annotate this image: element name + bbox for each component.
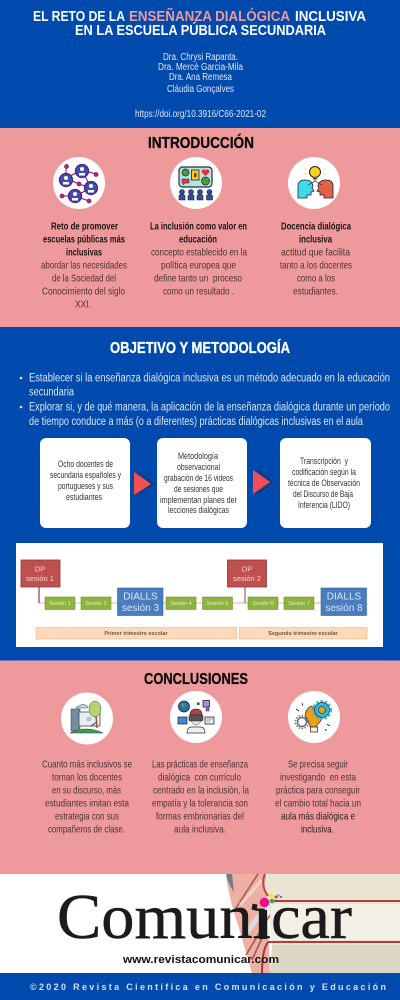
text: col 1: XXI. bbox=[75, 298, 91, 310]
arrow 1 bbox=[134, 472, 153, 495]
heading: introducción: INTRODUCCIÓN bbox=[148, 133, 254, 152]
text: col 2: como un resultado . bbox=[163, 286, 234, 298]
DP sesión 2: sesión 2 bbox=[233, 574, 261, 583]
text: col 1: Reto de promover bbox=[51, 220, 118, 232]
card: transcripción: Inferencia (LIDO) bbox=[298, 500, 350, 511]
text: conclusion 2: empatía y la tolerancia son bbox=[152, 798, 248, 810]
title bbox=[33, 7, 366, 39]
authors bbox=[158, 52, 243, 95]
text: col 2 bbox=[150, 220, 247, 298]
card: transcripción: del Discurso de Baja bbox=[293, 489, 353, 500]
authors: Dra. Chrysi Rapanta. bbox=[163, 52, 238, 63]
text: conclusion 1: tornan los docentes bbox=[52, 772, 122, 784]
card: metodología: grabación de 16 videos bbox=[164, 473, 233, 484]
green sessions: Sesión 2 bbox=[85, 601, 107, 607]
card: transcripción: Transcripción y bbox=[300, 456, 348, 467]
text: col 2: concepto establecido en la bbox=[151, 246, 247, 258]
text: col 3: como a los bbox=[297, 272, 335, 284]
authors: Dra. Mercè Garcia-Mila bbox=[158, 62, 243, 73]
text: conclusion 3: investigando en esta bbox=[280, 772, 356, 784]
website url: www.revistacomunicar.com bbox=[122, 954, 279, 966]
text: conclusion 1: Cuanto más inclusivos se bbox=[42, 758, 132, 770]
card: participantes: secundaria españoles y bbox=[50, 470, 121, 481]
green sessions: Sesión 7 bbox=[288, 601, 310, 607]
timeline diagram bbox=[16, 543, 383, 647]
text: conclusion 2: centrado en la inclusión, la bbox=[153, 784, 249, 796]
panel: header bbox=[0, 0, 400, 128]
text: col 2: define tanto un proceso bbox=[154, 272, 242, 284]
text: conclusion 2 bbox=[152, 758, 249, 836]
DIALLS sesión 8: DIALLS bbox=[327, 592, 362, 602]
icon: inclusive school bbox=[61, 692, 113, 744]
text: conclusion 2: Las prácticas de enseñanza bbox=[152, 758, 248, 770]
text: col 3: tanto a los docentes bbox=[280, 260, 352, 272]
card: participantes: estudiantes bbox=[66, 492, 102, 503]
text: col 1: abordar las necesidades bbox=[41, 260, 127, 272]
text: conclusion 1: estrategia con sus bbox=[55, 810, 119, 822]
title: ENSEÑANZA DIALÓGICA bbox=[129, 7, 290, 25]
text: conclusion 3: aula más dialógica e bbox=[281, 810, 355, 822]
logo: Comunicar wordmark: Comunıcar bbox=[57, 881, 352, 952]
green sessions: Sesión 6 bbox=[252, 601, 274, 607]
card: metodología bbox=[157, 438, 247, 528]
text: col 3: inclusiva bbox=[299, 234, 332, 246]
text: col 1: inclusivas bbox=[66, 246, 102, 258]
primer trimestre bbox=[36, 628, 236, 639]
text: col 3: actitud que facilita bbox=[281, 246, 350, 258]
panel: conclusiones bbox=[0, 660, 400, 874]
card: transcripción: técnica de Observación bbox=[288, 478, 360, 489]
DP sesión 1: DP bbox=[35, 564, 45, 574]
authors: Dra. Ana Remesa bbox=[169, 72, 232, 83]
authors: Cláudia Gonçalves bbox=[167, 84, 234, 95]
text: col 2: La inclusión como valor en bbox=[150, 220, 247, 232]
text: conclusion 1: estudiantes imitan esta bbox=[45, 798, 129, 810]
footer bbox=[0, 973, 400, 1000]
text: conclusion 2: aula inclusiva. bbox=[174, 824, 226, 836]
text: col 2: política europea que bbox=[161, 260, 236, 272]
DOI link: https://doi.org/10.3916/C66-2021-02 bbox=[135, 109, 266, 120]
DIALLS sesión 8: sesión 8 bbox=[325, 603, 363, 614]
text: conclusion 3: Se precisa seguir bbox=[288, 758, 348, 770]
text: conclusion 1: en su discurso, más bbox=[52, 784, 121, 796]
text: conclusion 3 bbox=[275, 758, 361, 836]
photo: books bbox=[226, 874, 400, 973]
panel: introducción bbox=[0, 128, 400, 327]
DIALLS sesión 3: DIALLS bbox=[123, 592, 158, 602]
green sessions bbox=[45, 597, 314, 610]
card: transcripción: codificación según la bbox=[292, 467, 357, 478]
card: metodología: Metodología bbox=[178, 451, 219, 462]
title: EN LA ESCUELA PÚBLICA SECUNDARIA bbox=[75, 21, 326, 39]
text: col 1 bbox=[41, 220, 127, 310]
green sessions: Sesión 5 bbox=[207, 601, 228, 607]
text: conclusion 1: compañeros de clase. bbox=[48, 824, 125, 836]
text: col 1: escuelas públicas más bbox=[43, 234, 125, 246]
card: metodología: lecciones dialógicas bbox=[168, 505, 229, 516]
DP sesión 2 bbox=[228, 560, 266, 587]
text: col 3 bbox=[280, 220, 352, 298]
card: participantes: Ocho docentes de bbox=[58, 459, 113, 470]
text: col 3: estudiantes. bbox=[293, 286, 338, 298]
icon: virtual reality bbox=[170, 691, 222, 743]
title: EL RETO DE LA bbox=[33, 9, 125, 25]
card: participantes bbox=[40, 438, 130, 528]
text: col 2: educación bbox=[179, 234, 217, 246]
card: transcripción bbox=[280, 438, 371, 528]
DP sesión 1: sesión 1 bbox=[26, 574, 54, 583]
arrow 2 bbox=[253, 470, 272, 494]
text: conclusion 2: dialógica con currículo bbox=[158, 772, 241, 784]
heading: conclusiones: CONCLUSIONES bbox=[144, 671, 248, 688]
card: metodología: implementan planes der bbox=[160, 495, 237, 506]
DP sesión 2: DP bbox=[242, 564, 252, 574]
bullet list: secundaria bbox=[29, 386, 74, 398]
DIALLS sesión 8 bbox=[321, 588, 366, 616]
segundo trimestre: Segundo trimestre escolar bbox=[268, 631, 339, 637]
DIALLS sesión 3 bbox=[118, 588, 163, 616]
DIALLS sesión 3: sesión 3 bbox=[122, 603, 160, 614]
text: col 3: Docencia dialógica bbox=[281, 220, 351, 232]
card: participantes: portugueses y sus bbox=[58, 481, 113, 492]
title: INCLUSIVA bbox=[295, 9, 366, 25]
heading: objetivo: OBJETIVO Y METODOLOGÍA bbox=[110, 338, 290, 357]
icon: light bulb and gears bbox=[288, 691, 340, 743]
green sessions: Sesión 1 bbox=[49, 601, 71, 607]
bullet list bbox=[20, 372, 390, 428]
icon: classroom board bbox=[170, 157, 222, 209]
text: conclusion 3: el cambio total hacia un bbox=[275, 798, 361, 810]
icon: network of people bbox=[53, 157, 105, 209]
panel: Comunicar logo band bbox=[0, 874, 400, 973]
text: conclusion 1 bbox=[42, 758, 132, 836]
primer trimestre: Primer trimestre escolar bbox=[104, 631, 168, 637]
text: conclusion 3: inclusiva. bbox=[301, 824, 334, 836]
footer: ©2020 Revista Científica en Comunicación y Educación bbox=[30, 982, 386, 992]
card: metodología: observacional bbox=[177, 462, 220, 473]
card: metodología: de sesiones que bbox=[174, 484, 223, 495]
panel: objetivo y metodología bbox=[0, 327, 400, 660]
text: col 1: de la Sociedad del bbox=[52, 272, 116, 284]
icon: dialogue heads with light bulb bbox=[288, 157, 340, 209]
text: conclusion 2: formas embrionarias del bbox=[156, 810, 244, 822]
text: col 1: Conocimiento del siglo bbox=[42, 286, 125, 298]
text: conclusion 3: práctica para conseguir bbox=[276, 784, 360, 796]
segundo trimestre bbox=[240, 628, 367, 639]
DP sesión 1 bbox=[21, 560, 60, 587]
green sessions: Sesión 4 bbox=[170, 601, 192, 607]
